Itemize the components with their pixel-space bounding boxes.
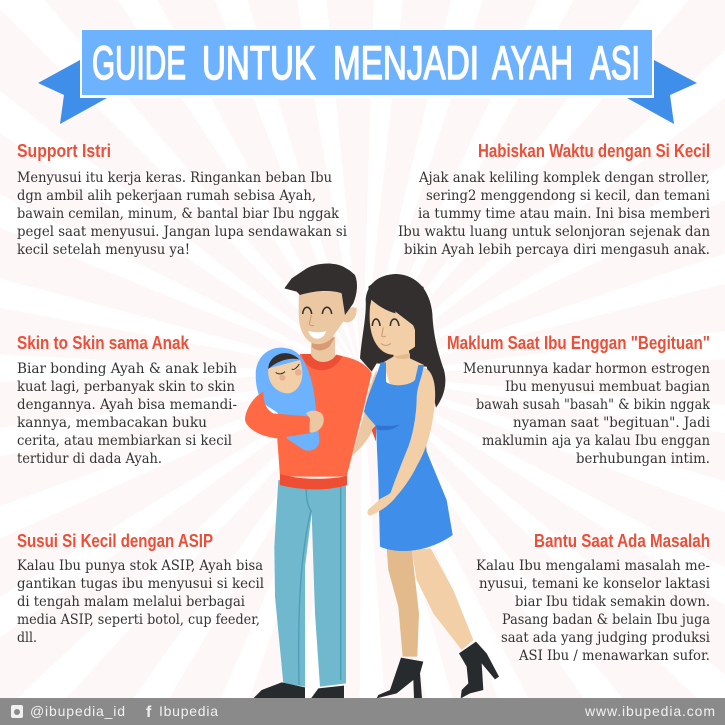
text block: bawah susah "basah" & bikin nggak [476,397,710,413]
woman front leg [412,548,473,650]
text block: kecil setelah menyusu ya! [17,242,190,258]
footer bar [0,698,725,725]
text block: nyusui, temani ke konselor laktasi [479,576,710,592]
text block: Ibu menyusui membuat bagian [505,379,710,395]
text block: kannya, membacakan buku [17,415,207,431]
text block: saat ada yang judging produksi [501,630,710,646]
text block [17,361,237,467]
panel: skin to skin [17,333,237,467]
text block: pegel saat menyusui. Jangan lupa sendawakan si [17,224,347,240]
title text: ASI [590,36,640,89]
man arm holding baby [245,392,324,438]
man shirt [277,354,372,477]
baby in blue wrap [256,348,319,451]
text block: Menurunnya kadar hormon estrogen [463,361,710,377]
text block: kuat lagi, perbanyak skin to skin [17,379,235,395]
right ribbon tail [627,60,697,124]
title banner [38,29,697,124]
woman chest and neck [383,347,424,385]
instagram handle: @ibupedia_id [30,703,125,719]
woman hair back [360,274,445,408]
text block: Biar bonding Ayah & anak lebih [17,361,237,377]
woman right arm and hand [367,367,435,516]
man collar [302,354,342,370]
man shirt hem [280,474,347,489]
text block [476,558,710,664]
panel: maklum [447,333,710,467]
dress shadow [376,424,400,430]
icon: instagram [11,705,23,718]
text block: bikin Ayah lebih percaya diri mengasuh anak. [404,242,710,258]
woman back leg [387,548,419,657]
text block: dengannya. Ayah bisa memandi- [17,397,237,413]
text block: berhubungan intim. [576,451,710,467]
facebook name: Ibupedia [159,703,218,719]
text block: Kalau Ibu mengalami masalah me- [476,558,710,574]
panel: bantu [476,531,710,664]
text block: nyaman saat "begituan". Jadi [513,415,710,431]
text block: Ajak anak keliling komplek dengan stroller, [418,170,710,186]
woman boots [377,642,499,698]
icon: facebook: f [146,704,152,721]
text block: Menyusui itu kerja keras. Ringankan beban Ibu [17,170,332,186]
text block [463,361,710,467]
text block: cerita, atau membiarkan si kecil [17,433,232,449]
heading: Susui Si Kecil dengan ASIP [17,531,213,551]
text block [17,170,347,258]
text block: ASI Ibu / menawarkan sufor. [518,648,710,664]
text block: bawain cemilan, minum, & bantal biar Ibu nggak [17,206,339,222]
website: www.ibupedia.com [584,703,715,719]
text block [398,170,710,258]
text block: ia tummy time atau main. Ini bisa memberi [418,206,710,222]
panel: support istri [17,141,347,258]
man shoes [253,682,344,698]
heading: Skin to Skin sama Anak [17,333,190,353]
text block: maklumin aja ya kalau Ibu enggan [482,433,710,449]
text block: biar Ibu tidak semakin down. [515,594,710,610]
text block: tertidur di dada Ayah. [17,451,162,467]
illustration: family [245,263,499,698]
woman left arm [352,370,377,457]
panel: susui si kecil [17,531,264,646]
man neck [311,337,335,363]
left ribbon tail [38,60,107,124]
text block: gantikan tugas ibu menyusui si kecil [17,576,264,592]
text block [17,558,264,646]
text block: dgn ambil alih pekerjaan rumah sebisa Ayah, [17,188,316,204]
title text: MENJADI [333,36,479,89]
text block: dll. [17,630,37,646]
title text: UNTUK [202,36,316,89]
text block: media ASIP, seperti botol, cup feeder, [17,612,260,628]
panel: habiskan waktu [398,141,710,258]
title text: AYAH [492,36,573,89]
banner background [80,29,654,98]
text block: Ibu waktu luang untuk selonjoran sejenak dan [398,224,710,240]
woman head [368,278,431,359]
heading: Support Istri [17,141,111,161]
text block: Kalau Ibu punya stok ASIP, Ayah bisa [17,558,263,574]
text block: sering2 menggendong si kecil, dan temani [426,188,710,204]
neck shadow [312,337,335,350]
text block: Pasang badan & belain Ibu juga [502,612,710,628]
man jeans [274,480,346,687]
man head [284,263,357,344]
text block: di tengah malam melalui berbagai [17,594,245,610]
woman blue dress [364,362,453,551]
title text: GUIDE [92,36,186,89]
